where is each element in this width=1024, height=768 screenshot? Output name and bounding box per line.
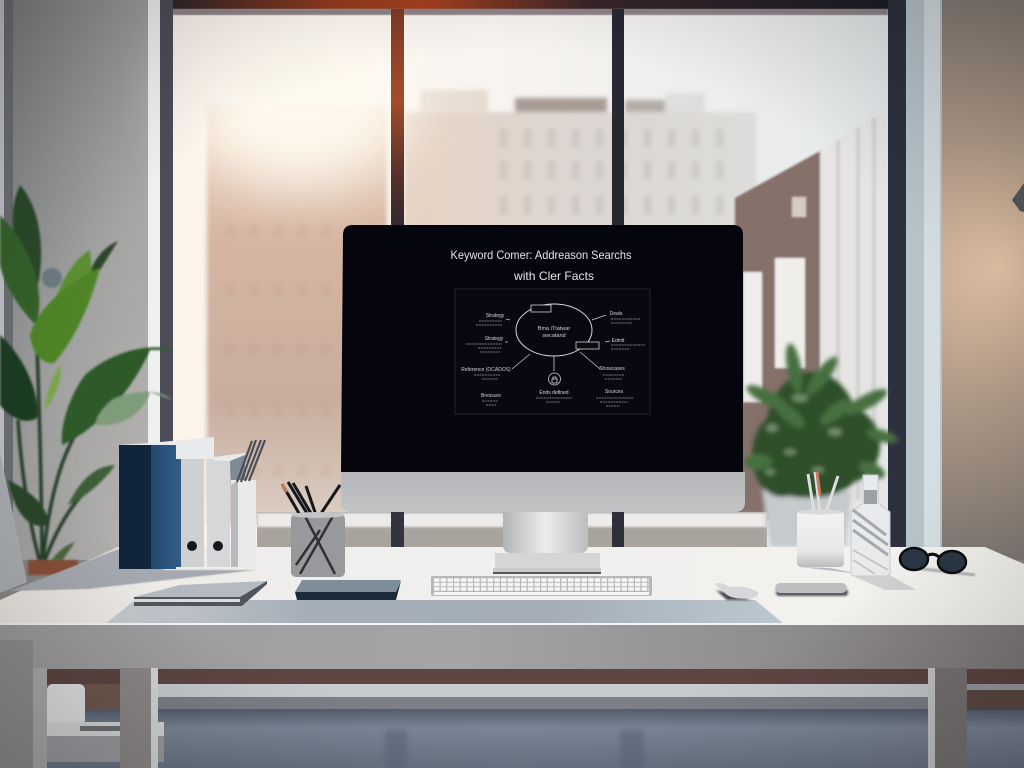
right wall: [940, 0, 1024, 560]
pencil holder: white: [231, 480, 256, 567]
building: left tower: [207, 105, 387, 525]
screen title: Keyword Comer: Addreason Searchs: [450, 248, 632, 262]
monitor stand: [503, 512, 588, 553]
screen title: [450, 248, 632, 283]
diagram center text: swcatand: [542, 333, 566, 339]
binder: white left: [181, 459, 204, 567]
monitor: [341, 225, 745, 574]
window frame: [160, 0, 942, 550]
diagram small lines: [466, 319, 645, 406]
diagram labels: Sources: [605, 389, 624, 395]
plant: left foreground: [0, 185, 174, 575]
binder: white cover: [119, 437, 214, 459]
white cup with pens: [797, 472, 860, 574]
desk: [0, 547, 1024, 768]
sun glow: [185, 0, 415, 190]
chair: [0, 452, 27, 593]
diagram labels: Bressure: [481, 393, 501, 399]
desk front shadow: [105, 600, 784, 624]
monitor screen: [341, 225, 743, 472]
window sill: [257, 512, 767, 547]
building: center block: [404, 90, 756, 230]
building: right brick and white: [735, 108, 886, 520]
diagram labels: [461, 311, 625, 399]
diagram tag top: [531, 305, 551, 312]
left wall: [0, 0, 160, 560]
diagram labels: Deals: [610, 311, 623, 317]
tablet: [295, 580, 401, 600]
trackpad: [775, 583, 848, 596]
mouse: [715, 583, 758, 600]
diagram labels: Strategy: [486, 313, 505, 319]
notebook: grey: [134, 581, 267, 606]
monitor chin: [341, 472, 745, 512]
binders: [119, 437, 265, 569]
mesh pencil cup: [282, 482, 345, 577]
desk top: [0, 547, 1024, 625]
screen diagram panel: [455, 289, 650, 414]
diagram center text: [538, 326, 570, 339]
diagram ellipse: [516, 304, 592, 356]
connector lines: [505, 315, 610, 371]
lock icon: [548, 373, 560, 385]
glass bottle: [851, 475, 916, 590]
diagram tag right: [576, 342, 599, 349]
floor and under desk: [0, 668, 1024, 768]
under-desk box and pot: [47, 684, 164, 762]
desk side shadow: [10, 549, 256, 591]
window view: city buildings: [172, 0, 890, 550]
diagram labels: Strategy: [485, 336, 504, 342]
pencils in holder: [237, 440, 265, 482]
binder: navy: [119, 445, 151, 569]
diagram labels: Ends defined: [539, 390, 569, 396]
desk front edge: [0, 625, 1024, 669]
diagram labels: Showcases: [599, 366, 625, 372]
binder: white right: [207, 459, 230, 567]
diagram center text: Bma iTtatwar: [538, 326, 570, 332]
screen title: with Cler Facts: [513, 269, 594, 283]
monitor base shadow: [495, 553, 600, 569]
wall lamp edge: [1012, 183, 1024, 212]
desk legs: [0, 640, 33, 768]
diagram labels: Edmit: [612, 338, 625, 344]
monitor base: [493, 568, 601, 573]
plant: right background: [744, 342, 899, 547]
diagram labels: Reference (OCADOS): [461, 367, 511, 373]
keyboard: [431, 576, 652, 596]
binder: blue: [151, 445, 176, 569]
sunglasses: [900, 548, 975, 575]
